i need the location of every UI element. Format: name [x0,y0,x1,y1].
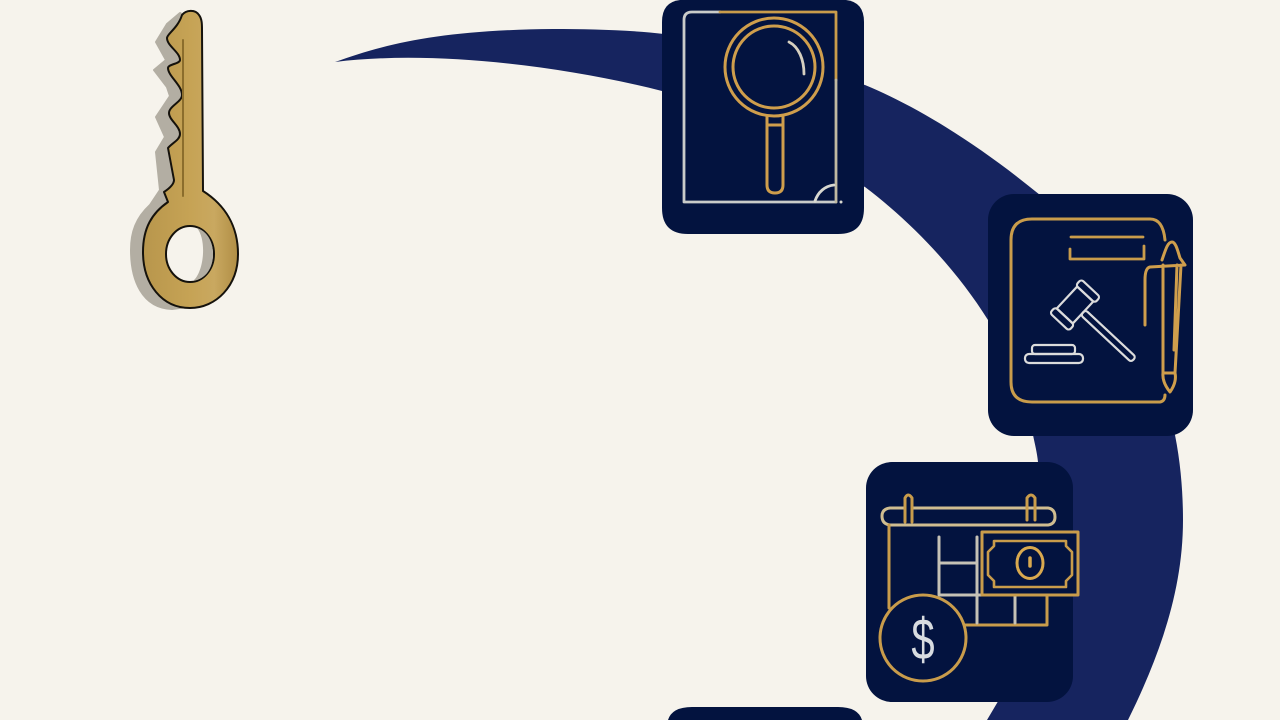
panel: partially visible bottom tile [668,707,862,720]
dollar coin: $ [911,606,935,672]
tile [866,462,1073,702]
icon: golden key [131,11,238,309]
key ring hole [166,226,214,282]
key shadow [131,13,200,309]
calendar rings [905,495,1035,522]
panel: calendar and money tile [866,462,1078,702]
folded corner [815,185,834,201]
key body [143,11,238,308]
pen [1145,242,1185,392]
dollar coin [880,595,966,681]
tile [662,0,864,234]
key hole inner shadow [193,228,213,281]
key blade groove [182,40,184,196]
lens glare [789,42,804,74]
panel: magnifier document tile [662,0,864,234]
banknote [982,532,1078,595]
gavel base [1025,345,1083,363]
header lines [1070,237,1144,259]
tile [988,194,1193,436]
panel: gavel legal document tile [988,194,1193,436]
calendar grid [939,537,1015,623]
gavel [1050,279,1149,376]
calendar body [889,525,1047,625]
document outline [684,12,836,202]
curved navy arc band [335,29,1183,720]
legal page outline [1011,219,1165,402]
magnifying glass [725,18,823,116]
calendar top bar [882,508,1055,525]
